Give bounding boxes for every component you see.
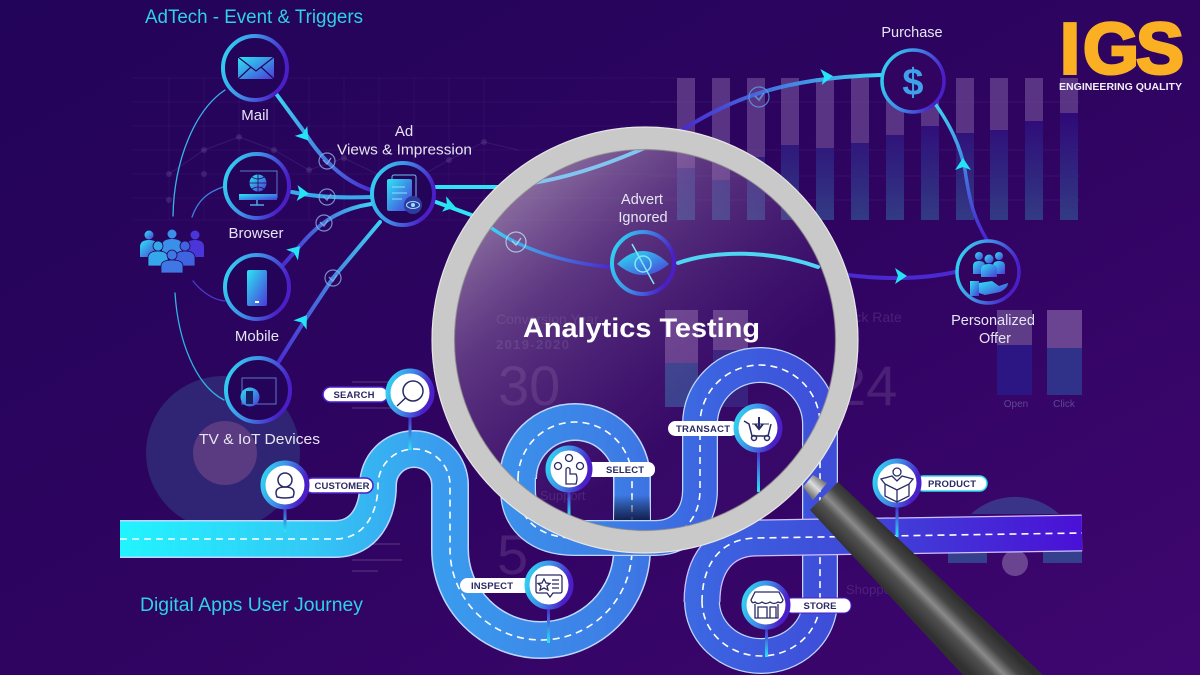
channel labels: Mail — [241, 107, 269, 124]
faint statistics text: 5 — [497, 523, 528, 586]
icon: ad document — [372, 163, 434, 225]
background chart: small bars centre — [665, 310, 748, 407]
arrow line: tv to ad — [276, 222, 380, 366]
flow labels: Purchase — [881, 25, 943, 41]
node: transact: TRANSACT — [676, 424, 730, 435]
flow labels: Offer — [979, 331, 1011, 347]
arrow line: offer to purchase — [936, 105, 987, 240]
node: search: SEARCH — [334, 390, 375, 401]
faint statistics text: 30 — [498, 354, 560, 417]
channel labels: TV & IoT Devices — [199, 431, 320, 448]
magnifier handle — [803, 475, 1043, 675]
icon: shopping cart — [744, 417, 771, 440]
channel labels: Ad — [395, 123, 413, 140]
channel labels: Browser — [228, 225, 284, 242]
icon: person — [276, 473, 294, 498]
node: inspect: INSPECT — [471, 581, 513, 592]
icon: review bubble — [536, 575, 562, 597]
heading: digital apps user journey: Digital Apps User Journey — [140, 595, 364, 616]
flow labels: Ignored — [618, 210, 668, 226]
node: select: SELECT — [606, 465, 644, 476]
channel labels: Views & Impression — [337, 142, 472, 158]
faint statistics text: Shoppers — [846, 582, 902, 597]
node: inspect — [460, 563, 571, 643]
arrow line: ad to purchase — [436, 75, 880, 187]
arrow line: browser to ad — [292, 192, 371, 197]
icon: mobile — [225, 255, 289, 319]
icon: open box with bulb — [881, 468, 913, 502]
channel labels: Mobile — [235, 328, 279, 345]
road segment: entry and first loops — [120, 422, 650, 640]
faint statistics text: 24 — [835, 354, 897, 417]
node: store: STORE — [804, 601, 836, 612]
faint statistics text: Click Rate — [838, 309, 902, 325]
thin lines from users to channels — [173, 90, 225, 400]
arrow line: advert ignored to offer — [678, 254, 955, 278]
icon: magnifier — [397, 381, 423, 406]
arrowheads — [286, 68, 971, 330]
icon: tv and iot — [226, 358, 290, 422]
icon: personalized offer — [957, 241, 1019, 303]
logo: IGS: ENGINEERING QUALITY — [1059, 81, 1182, 93]
flow labels: Advert — [621, 192, 663, 208]
channel labels — [199, 107, 472, 448]
background chart: small bars right: Open — [1004, 399, 1028, 410]
flows: adtech connections — [173, 75, 987, 400]
arrow line: ad to advert ignored — [436, 202, 610, 267]
icon: purchase dollar: $ — [902, 62, 924, 104]
arrow line: mobile to ad — [283, 204, 371, 265]
magnifier ring — [432, 127, 858, 553]
icon: hand selecting — [554, 454, 584, 484]
background chart: faint line chart grid — [133, 78, 680, 220]
node: store — [744, 583, 851, 657]
icon: purchase dollar — [882, 50, 944, 112]
heading: adtech: AdTech - Event & Triggers — [145, 7, 363, 28]
title: analytics testing: Analytics Testing — [523, 313, 760, 343]
faint statistics text: 2019-2020 — [496, 337, 569, 352]
node: transact — [668, 406, 780, 492]
background chart: stacked bars top right — [650, 78, 1080, 220]
node: customer: CUSTOMER — [314, 481, 370, 492]
icon: user group — [140, 230, 204, 273]
flow labels: Personalized — [951, 313, 1035, 329]
background chart: faint donut right — [948, 497, 1082, 576]
node: product: PRODUCT — [928, 479, 976, 490]
flow labels — [618, 25, 1035, 347]
background chart: small bars right: Click — [1053, 399, 1076, 410]
icon: browser — [225, 154, 289, 218]
node: select — [548, 448, 655, 516]
faint statistics text: Support — [540, 488, 586, 503]
node: search — [323, 371, 432, 450]
node: product — [875, 461, 987, 537]
road: digital apps user journey — [120, 365, 1082, 656]
icon: mail — [223, 36, 287, 100]
clock markers — [316, 87, 769, 286]
background chart: small bars right — [997, 310, 1082, 410]
node: customer — [263, 463, 373, 532]
lens glass tint — [453, 148, 837, 532]
road segment: transact and store loops — [518, 365, 820, 656]
icon: eye crossed — [612, 232, 674, 294]
faint statistics text — [496, 309, 902, 597]
icon: storefront — [751, 592, 783, 618]
road segment: exit to the right — [702, 533, 1082, 602]
faint text lines beside road — [352, 382, 402, 571]
background chart: faint donut left — [146, 376, 300, 530]
arrow line: mail to ad — [277, 95, 371, 190]
logo: IGS: IGS — [1060, 10, 1184, 90]
faint statistics text: Conversion Year — [496, 311, 599, 327]
